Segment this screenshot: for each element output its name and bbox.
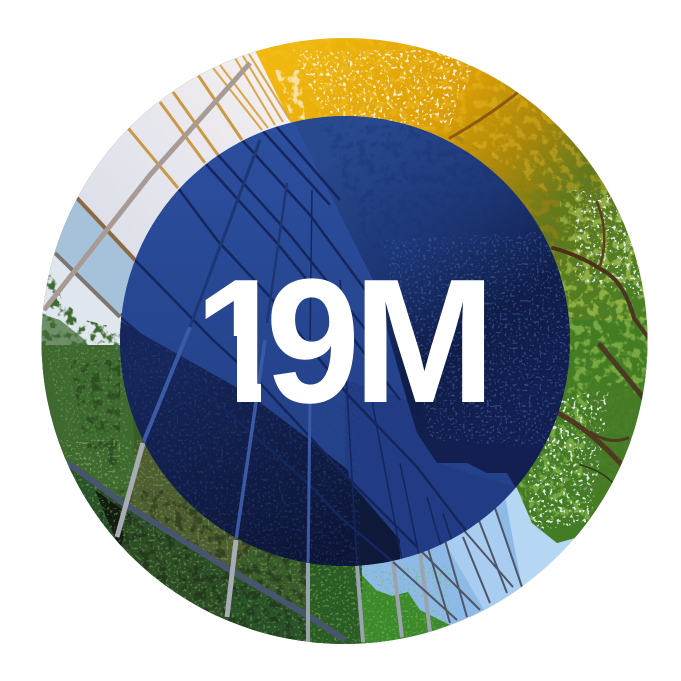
reflected tree, lower left [120, 322, 358, 566]
glass below foliage [345, 381, 516, 566]
lower window band [69, 468, 340, 644]
white glass panels [77, 51, 291, 313]
pale blue glass [54, 199, 135, 315]
reflected tree tops, left [42, 274, 120, 345]
heading: 19M figure: 1 [194, 242, 289, 440]
tree silhouette, right [288, 110, 580, 487]
panel: navy overlay circle [110, 110, 580, 580]
mullions [44, 54, 522, 642]
heading: 19M figure [206, 278, 484, 404]
infographic: circular photo badge [42, 38, 648, 644]
reflected tree, left [42, 345, 134, 500]
tree canopy: gold to green foliage [240, 30, 660, 550]
facade lines [120, 125, 483, 565]
branches [450, 93, 650, 482]
reflected clouds [42, 253, 122, 345]
building facade [30, 30, 522, 660]
reflected trees, bottom [348, 575, 450, 644]
heading: 19M figure: 9M [265, 242, 495, 440]
reflected sky, lower right glass [354, 499, 521, 644]
